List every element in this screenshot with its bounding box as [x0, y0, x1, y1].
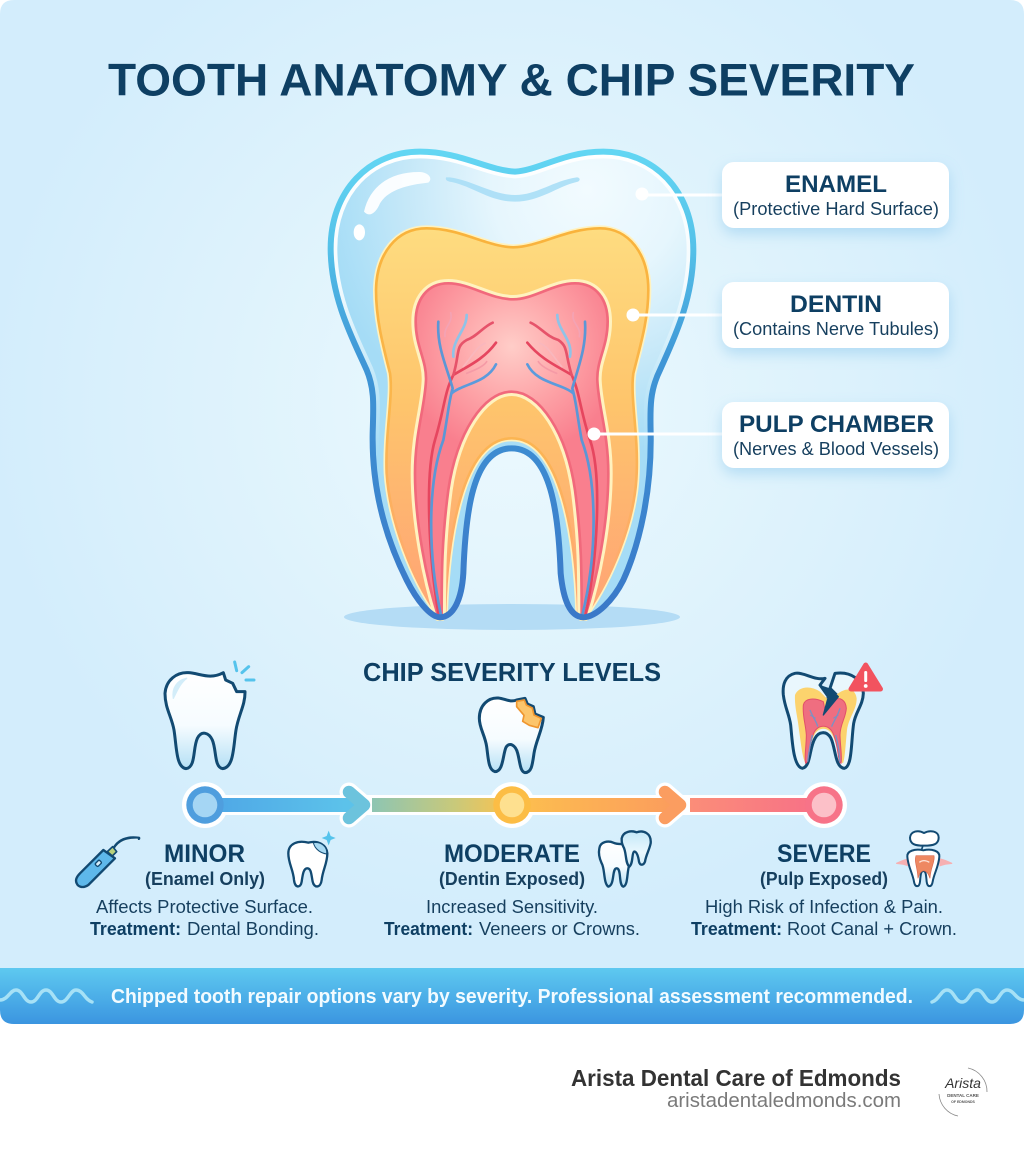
panel: severe: Root Canal + Crown.: [787, 919, 957, 939]
tooth anatomy diagram: [331, 152, 693, 630]
footer brand text: [571, 1065, 901, 1112]
tooth ground shadow: [344, 604, 680, 630]
bottom banner: [0, 968, 1024, 1024]
panel: moderate: MODERATE: [444, 840, 580, 868]
callout: enamel: [722, 162, 949, 228]
timeline halo: [182, 782, 847, 828]
callout: enamel: (Protective Hard Surface): [733, 199, 939, 219]
logo: Arista: [944, 1075, 981, 1091]
panel: minor: Affects Protective Surface.: [96, 897, 313, 917]
icon: bonded tooth with sparkle: [288, 831, 336, 886]
arrowhead two: [665, 792, 680, 818]
pulp chamber layer: [415, 283, 608, 617]
panel: severe: [691, 840, 957, 939]
segment: minor to moderate: [205, 798, 360, 812]
banner message: Chipped tooth repair options vary by severity. Professional assessment recommended.: [111, 986, 913, 1008]
enamel highlights: [354, 172, 580, 240]
severity timeline: [182, 782, 847, 828]
wave ornament right: [932, 990, 1024, 1002]
leader line: pulp chamber: [588, 428, 726, 440]
panel: moderate: [384, 840, 640, 939]
leader line: dentin: [626, 308, 726, 322]
blood vessels and nerves: [429, 313, 597, 617]
outer tooth outline: [331, 152, 693, 617]
icon: root canal with crown: [897, 831, 952, 886]
logo: [939, 1068, 987, 1116]
panel: minor: [90, 840, 319, 939]
panel: moderate: Increased Sensitivity.: [426, 897, 598, 917]
arrowhead one: [349, 792, 364, 818]
panel: minor: MINOR: [164, 840, 245, 868]
panel: severe: (Pulp Exposed): [760, 869, 888, 889]
node: moderate: [493, 786, 531, 824]
logo: OF EDMONDS: [951, 1100, 976, 1104]
callout: dentin: (Contains Nerve Tubules): [733, 319, 939, 339]
node: minor: [186, 786, 224, 824]
logo: DENTAL CARE: [947, 1093, 979, 1098]
heading: chip severity levels: CHIP SEVERITY LEVELS: [363, 657, 661, 687]
callout: dentin: [722, 282, 949, 348]
callout: dentin: DENTIN: [790, 291, 882, 318]
icon: veneer and crown teeth: [599, 831, 651, 887]
callout: pulp chamber: [722, 402, 949, 468]
panel: severe: High Risk of Infection & Pain.: [705, 897, 943, 917]
footer brand text: Arista Dental Care of Edmonds: [571, 1065, 901, 1091]
panel: moderate: Veneers or Crowns.: [479, 919, 640, 939]
icon: bonding curing tool: [76, 838, 139, 887]
footer brand text: aristadentaledmonds.com: [667, 1090, 901, 1112]
panel: severe: SEVERE: [777, 840, 871, 868]
title: TOOTH ANATOMY & CHIP SEVERITY: [108, 54, 915, 106]
callout: enamel: ENAMEL: [785, 171, 887, 198]
segment: moderate to severe: [512, 798, 677, 812]
panel: minor: Treatment:: [90, 919, 181, 939]
wave ornament left: [0, 990, 92, 1002]
segment: fade to severe: [690, 798, 824, 812]
icon: severe cracked tooth: [783, 673, 863, 768]
icon: minor chipped tooth: [165, 662, 254, 769]
panel: moderate: Treatment:: [384, 919, 473, 939]
segment: fade to moderate: [372, 798, 512, 812]
icon: warning triangle: [851, 665, 880, 689]
callout: pulp chamber: PULP CHAMBER: [739, 411, 934, 438]
icon: moderate chipped tooth: [479, 698, 543, 773]
panel: minor: (Enamel Only): [145, 869, 265, 889]
node: severe: [805, 786, 843, 824]
panel: moderate: (Dentin Exposed): [439, 869, 585, 889]
callout: pulp chamber: (Nerves & Blood Vessels): [733, 439, 939, 459]
leader line: enamel: [636, 188, 726, 200]
enamel layer: [331, 152, 693, 617]
panel: minor: Dental Bonding.: [187, 919, 319, 939]
dentin layer: [376, 228, 648, 613]
panel: severe: Treatment:: [691, 919, 782, 939]
